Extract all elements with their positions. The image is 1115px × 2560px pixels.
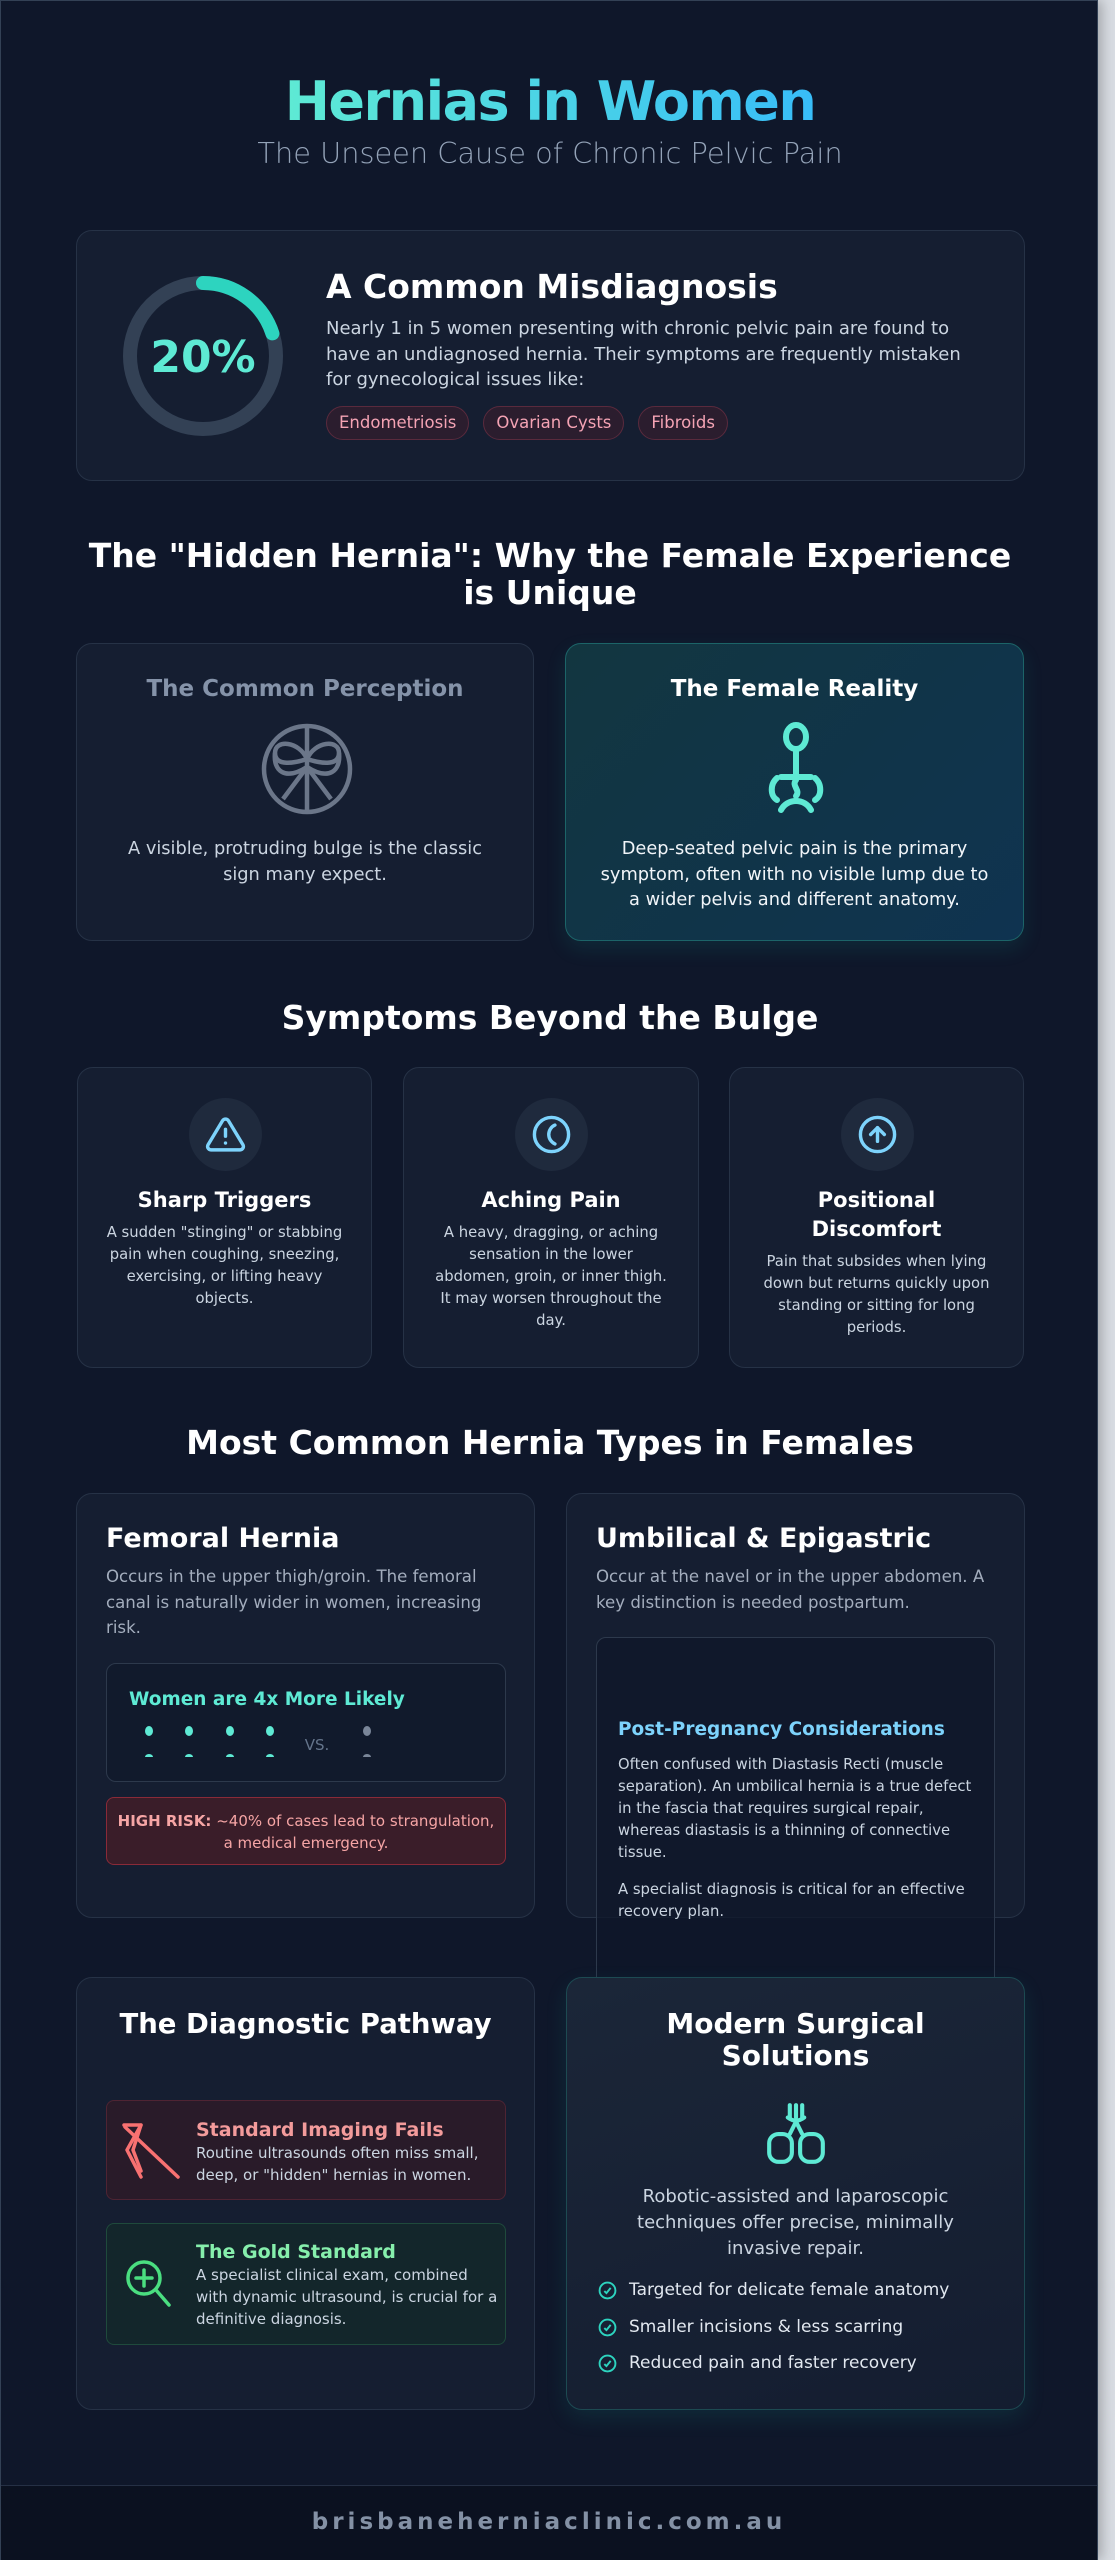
icon: moon <box>515 1098 588 1171</box>
text block: A visible, protruding bulge is the classic sign many expect. <box>128 838 482 884</box>
text block: Pain that subsides when lying down but returns quickly upon standing or sitting for long periods. <box>764 1253 989 1336</box>
chart: 20% ring <box>123 276 283 436</box>
heading: Discomfort <box>812 1217 941 1241</box>
heading: hidden hernia <box>88 536 1011 612</box>
text block: A sudden "stinging" or stabbing pain when coughing, sneezing, exercising, or lifting heavy objects. <box>107 1224 342 1307</box>
text block: Occurs in the upper thigh/groin. The femoral canal is naturally wider in women, increasing risk. <box>106 1567 481 1637</box>
panel: umbilical <box>566 1493 1025 1918</box>
text block: A heavy, dragging, or aching sensation in the lower abdomen, groin, or inner thigh. It may worsen throughout the day. <box>435 1224 667 1329</box>
panel: surgical solutions <box>566 1977 1025 2410</box>
footer: brisbaneherniaclinic.com.au <box>312 2509 786 2535</box>
heading: hernia types: Most Common Hernia Types in Females <box>186 1423 914 1462</box>
chart: 4x likely <box>106 1663 506 1782</box>
text block: A specialist diagnosis is critical for an effective recovery plan. <box>618 1881 965 1920</box>
tags <box>326 406 728 440</box>
icon: magnifier plus <box>126 2260 171 2307</box>
callout: post-pregnancy <box>596 1637 995 2003</box>
list: benefits: Reduced pain and faster recovery <box>629 2353 917 2373</box>
text block: Deep-seated pelvic pain is the primary symptom, often with no visible lump due to a wider pelvis and different anatomy. <box>601 838 988 910</box>
icon: pelvis figure <box>768 722 824 813</box>
icon: warning <box>189 1098 262 1171</box>
icon: arrow up circle <box>841 1098 914 1171</box>
text block: Robotic-assisted and laparoscopic techniques offer precise, minimally invasive repair. <box>637 2186 954 2259</box>
title: Hernias in Women <box>285 70 815 133</box>
heading: The Female Reality <box>671 676 918 702</box>
heading: Aching Pain <box>481 1188 621 1212</box>
footer <box>1 2485 1097 2560</box>
heading: Solutions <box>722 2039 869 2072</box>
heading: The Diagnostic Pathway <box>119 2008 492 2040</box>
heading: Post-Pregnancy Considerations <box>618 1719 945 1740</box>
list: benefits: Smaller incisions & less scarring <box>629 2316 903 2336</box>
panel: femoral <box>76 1493 535 1918</box>
panel: aching pain <box>403 1067 699 1368</box>
icon: broken scan <box>122 2123 180 2179</box>
heading <box>812 1188 941 1241</box>
callout: gold standard <box>106 2223 506 2345</box>
heading: The Common Perception <box>146 676 464 702</box>
tags: Fibroids <box>651 413 715 432</box>
subtitle: The Unseen Cause of Chronic Pelvic Pain <box>257 136 843 170</box>
callout: high risk: HIGH RISK: ~40% of cases lead to strangulation, a medical emergency. <box>118 1812 494 1852</box>
heading: A Common Misdiagnosis <box>326 267 778 306</box>
heading: symptoms: Symptoms Beyond the Bulge <box>282 998 818 1037</box>
callout: imaging fails <box>106 2100 506 2200</box>
panel: common perception <box>76 643 534 941</box>
panel: sharp triggers <box>77 1067 372 1368</box>
heading <box>666 2007 925 2072</box>
text block: Occur at the navel or in the upper abdomen. A key distinction is needed postpartum. <box>596 1567 984 1612</box>
text block: Nearly 1 in 5 women presenting with chronic pelvic pain are found to have an undiagnosed hernia. Their symptoms are frequently mistaken for gynecological issues like: <box>326 318 961 390</box>
chart: 4x likely: VS. <box>305 1736 329 1754</box>
heading: Sharp Triggers <box>138 1188 311 1212</box>
panel: misdiagnosis <box>76 230 1025 481</box>
panel: female reality <box>565 643 1024 941</box>
panel: positional discomfort <box>729 1067 1024 1368</box>
chart: 4x likely: Women are 4x More Likely <box>129 1689 405 1710</box>
callout: high risk <box>106 1797 506 1865</box>
heading: Modern Surgical <box>666 2007 925 2040</box>
heading: hidden hernia: is Unique <box>463 573 637 612</box>
heading: Femoral Hernia <box>106 1523 339 1554</box>
tags: Ovarian Cysts <box>496 413 611 432</box>
text block: Often confused with Diastasis Recti (muscle separation). An umbilical hernia is a true defect in the fascia that requires surgical repair, whereas diastasis is a thinning of connective tissue. <box>618 1756 971 1861</box>
list: benefits: Targeted for delicate female anatomy <box>629 2280 949 2300</box>
list: benefits <box>598 2280 949 2373</box>
icon: bulge <box>262 724 352 814</box>
callout: gold standard: The Gold Standard <box>196 2241 396 2263</box>
heading: Positional <box>818 1188 935 1212</box>
callout: gold standard: A specialist clinical exam, combined with dynamic ultrasound, is crucial for a definitive diagnosis. <box>196 2266 497 2328</box>
heading: Umbilical & Epigastric <box>596 1523 931 1554</box>
heading: hidden hernia: The "Hidden Hernia": Why the Female Experience <box>89 536 1011 575</box>
icon: surgical tool <box>767 2103 825 2164</box>
tags: Endometriosis <box>339 413 456 432</box>
panel: diagnostic pathway <box>76 1977 535 2410</box>
callout: imaging fails: Standard Imaging Fails <box>196 2119 444 2141</box>
chart: 20% ring: 20% <box>150 332 256 383</box>
callout: imaging fails: Routine ultrasounds often miss small, deep, or "hidden" hernias in women. <box>196 2144 478 2184</box>
